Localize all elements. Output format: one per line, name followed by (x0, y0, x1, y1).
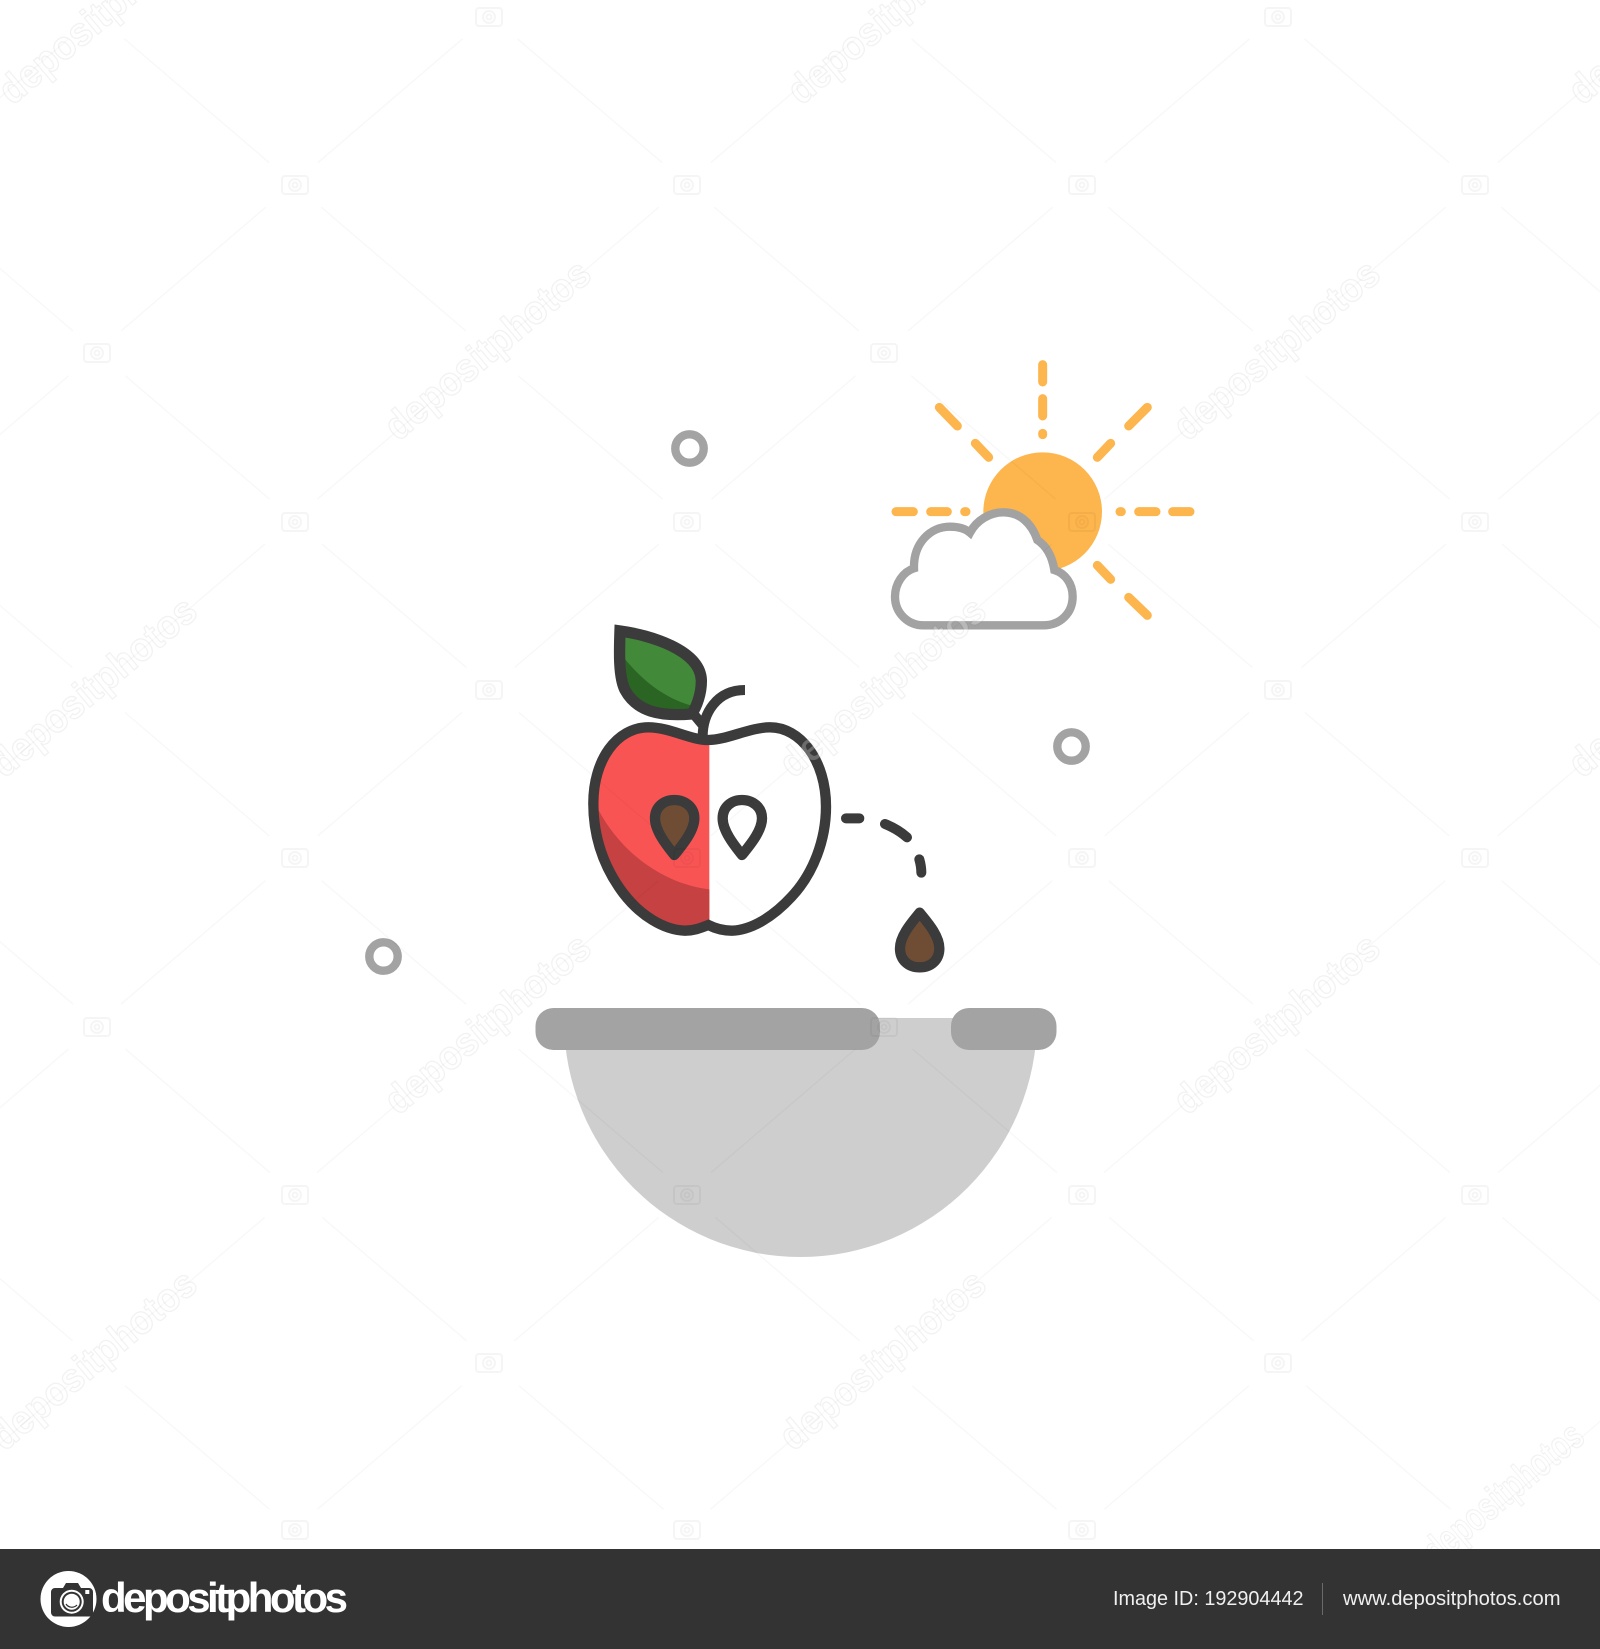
watermark overlay: depositphotos (376, 251, 599, 449)
sun rays (896, 365, 1190, 615)
apple stem (692, 690, 745, 737)
footer divider (1322, 1583, 1323, 1615)
watermark overlay: depositphotos (1165, 925, 1388, 1123)
brown seed in red half (655, 800, 694, 855)
bowl rim left segment (536, 1008, 880, 1050)
website url: www.depositphotos.com (1342, 1588, 1560, 1610)
bowl rim right segment (951, 1008, 1056, 1050)
icon: falling seed (900, 913, 939, 967)
icon: sun (896, 365, 1190, 615)
decorative ring: right (1057, 732, 1086, 761)
icon: half apple (587, 631, 826, 937)
arrow: dashed seed path (846, 818, 921, 873)
watermark overlay: depositphotos (376, 925, 599, 1123)
empty seed pocket in white half (723, 800, 762, 855)
decorative ring: left (369, 942, 398, 971)
footer bar (0, 1549, 1600, 1649)
sun disc (983, 452, 1102, 571)
watermark overlay: depositphotos (771, 588, 994, 786)
leaf (617, 631, 701, 720)
watermark overlay: depositphotos (1165, 251, 1388, 449)
bowl body (564, 1018, 1037, 1257)
logo wordmark: depositphotos (101, 1574, 348, 1621)
illustration group (369, 365, 1190, 1257)
icon: bowl (536, 1008, 1056, 1257)
watermark overlay: depositphotos (771, 1261, 994, 1459)
decorative ring: top (675, 434, 704, 463)
image id: Image ID: 192904442 (1113, 1588, 1304, 1610)
apple body (587, 723, 826, 937)
icon: cloud (895, 512, 1073, 625)
icon: depositphotos camera logo (40, 1571, 96, 1627)
